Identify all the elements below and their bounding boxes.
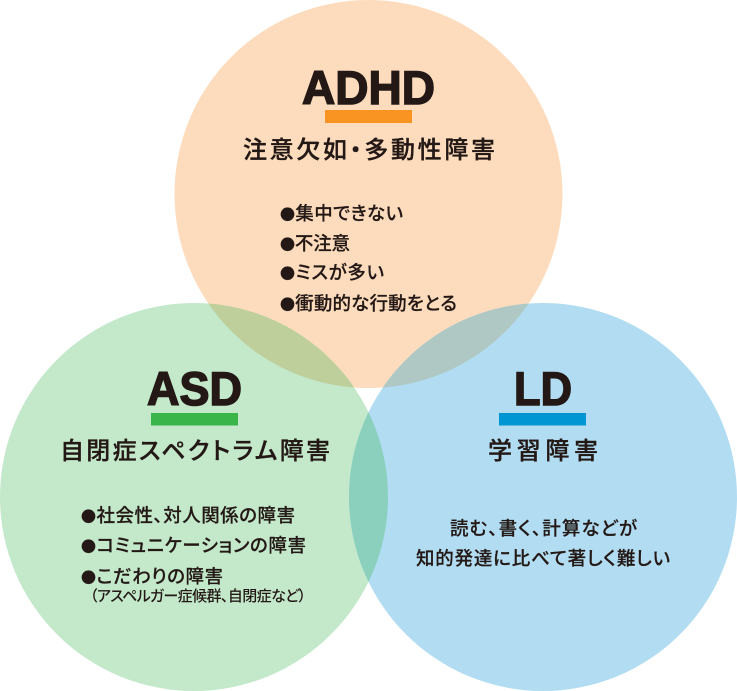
- circle: LD: [349, 303, 737, 691]
- panel: ADHD: [243, 61, 495, 316]
- list: ASD traits: ●こだわりの障害: [81, 563, 223, 589]
- description: LD: [416, 515, 670, 571]
- list: ADHD symptoms: ●衝動的な行動をとる: [280, 290, 457, 316]
- panel: ASD: [60, 362, 330, 606]
- subtitle: LD: 学習障害: [488, 431, 598, 466]
- list: ASD traits: [81, 502, 306, 606]
- list: ADHD symptoms: [280, 200, 457, 316]
- list: ASD traits: （アスペルガー症候群、自閉症など）: [90, 585, 306, 606]
- heading: ADHD: ADHD: [302, 61, 435, 114]
- overlap: ASD and LD: [349, 412, 388, 582]
- list: ADHD symptoms: ●不注意: [280, 230, 350, 256]
- description: LD: 知的発達に比べて著しく難しい: [416, 545, 670, 571]
- circle: ASD: [0, 303, 388, 691]
- list: ASD traits: ●社会性、対人関係の障害: [81, 502, 295, 528]
- panel: LD: [416, 362, 670, 571]
- subtitle: ADHD: 注意欠如・多動性障害: [243, 130, 495, 165]
- list: ASD traits: ●コミュニケーションの障害: [81, 532, 306, 558]
- circle: ADHD: [174, 0, 562, 388]
- color bar: LD: [499, 413, 586, 426]
- description: LD: 読む、書く、計算などが: [450, 515, 638, 541]
- color bar: ADHD: [325, 110, 412, 123]
- heading: LD: LD: [514, 362, 572, 415]
- list: ADHD symptoms: ●集中できない: [280, 200, 403, 226]
- overlap: ADHD and LD: [383, 304, 528, 388]
- subtitle: ASD: 自閉症スペクトラム障害: [60, 431, 330, 466]
- list: ADHD symptoms: ●ミスが多い: [280, 259, 384, 285]
- overlap: ADHD and ASD: [208, 304, 354, 388]
- color bar: ASD: [151, 413, 238, 426]
- heading: ASD: ASD: [147, 362, 242, 415]
